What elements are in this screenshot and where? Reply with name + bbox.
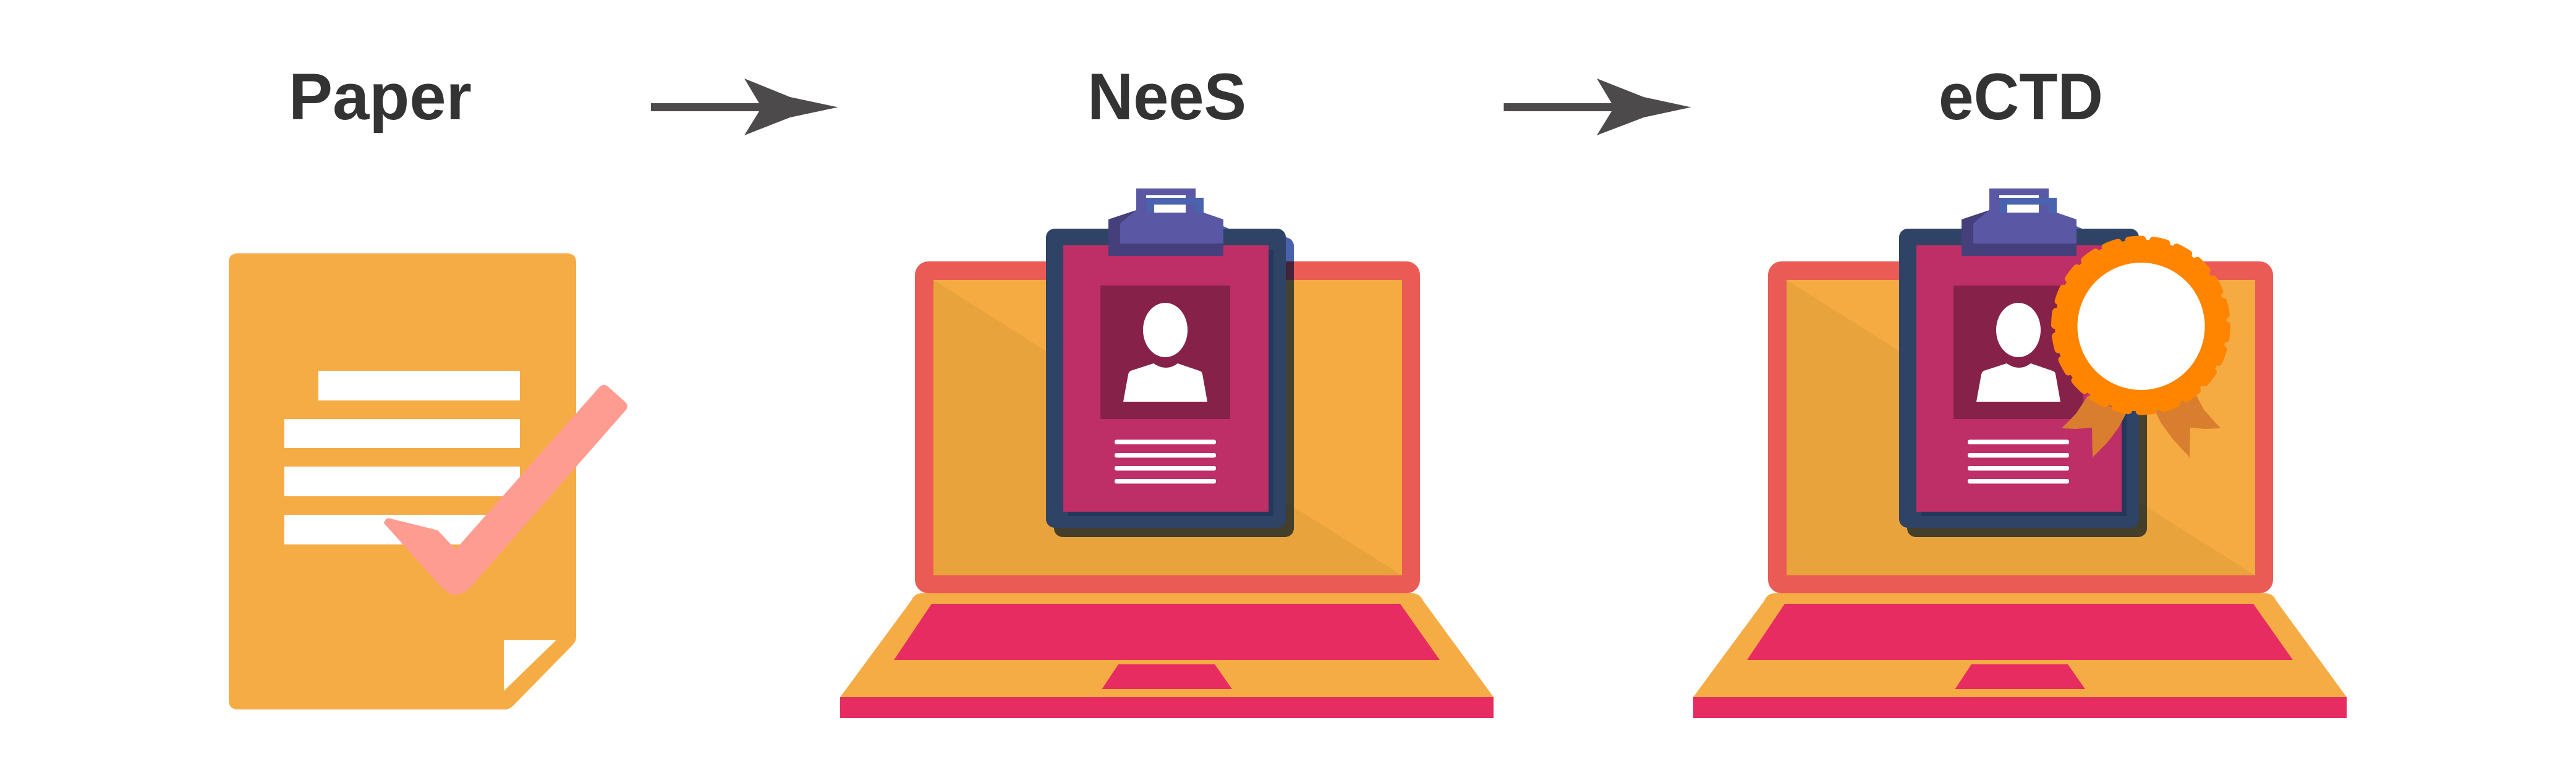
check mark [384,385,627,595]
folded corner [504,640,556,691]
trackpad [1955,664,2085,689]
document sheet [229,253,576,709]
laptop display [1787,280,2255,575]
arrow: NeeS to eCTD [1503,78,1691,135]
clipboard shadow [1907,237,2147,537]
laptop front strip [1693,697,2347,718]
page shadow [1068,250,1273,516]
trackpad [1102,664,1232,689]
right ribbon [2155,394,2221,457]
certification seal [2055,240,2227,457]
icon: NeeS laptop with clipboard [840,188,1494,718]
laptop base [1693,593,2347,697]
laptop screen frame [915,261,1420,593]
profile photo [1953,286,2083,419]
page shadow [1921,250,2127,516]
clipboard board [1046,229,1286,528]
clipboard page [1916,245,2122,512]
clipboard clip [1108,188,1223,256]
icon: paper document with check mark [229,253,627,709]
display shading [1787,280,2255,575]
clip shadow [2000,198,2085,235]
title: NeeS: NeeS [1087,59,1246,133]
display shading [933,280,1402,575]
laptop screen frame [1768,261,2273,593]
clipboard page [1063,245,1269,512]
profile photo [1100,286,1230,419]
title: Paper: Paper [289,59,472,133]
keyboard [1747,604,2293,660]
laptop base [840,593,1494,697]
arrow: Paper to NeeS [651,78,838,135]
keyboard [894,604,1440,660]
title: eCTD: eCTD [1939,59,2103,133]
laptop display [933,280,1402,575]
icon: eCTD laptop with clipboard and seal [1693,188,2347,718]
scalloped rosette [2055,240,2227,412]
clipboard clip [1962,188,2077,256]
page text lines [1115,440,1216,483]
left ribbon [2062,396,2126,457]
page text lines [1968,440,2069,483]
text lines [284,371,520,544]
white centre [2077,263,2204,390]
clip shadow [1147,198,1231,235]
clipboard shadow [1054,237,1294,537]
clipboard board [1899,229,2139,528]
laptop front strip [840,697,1494,718]
